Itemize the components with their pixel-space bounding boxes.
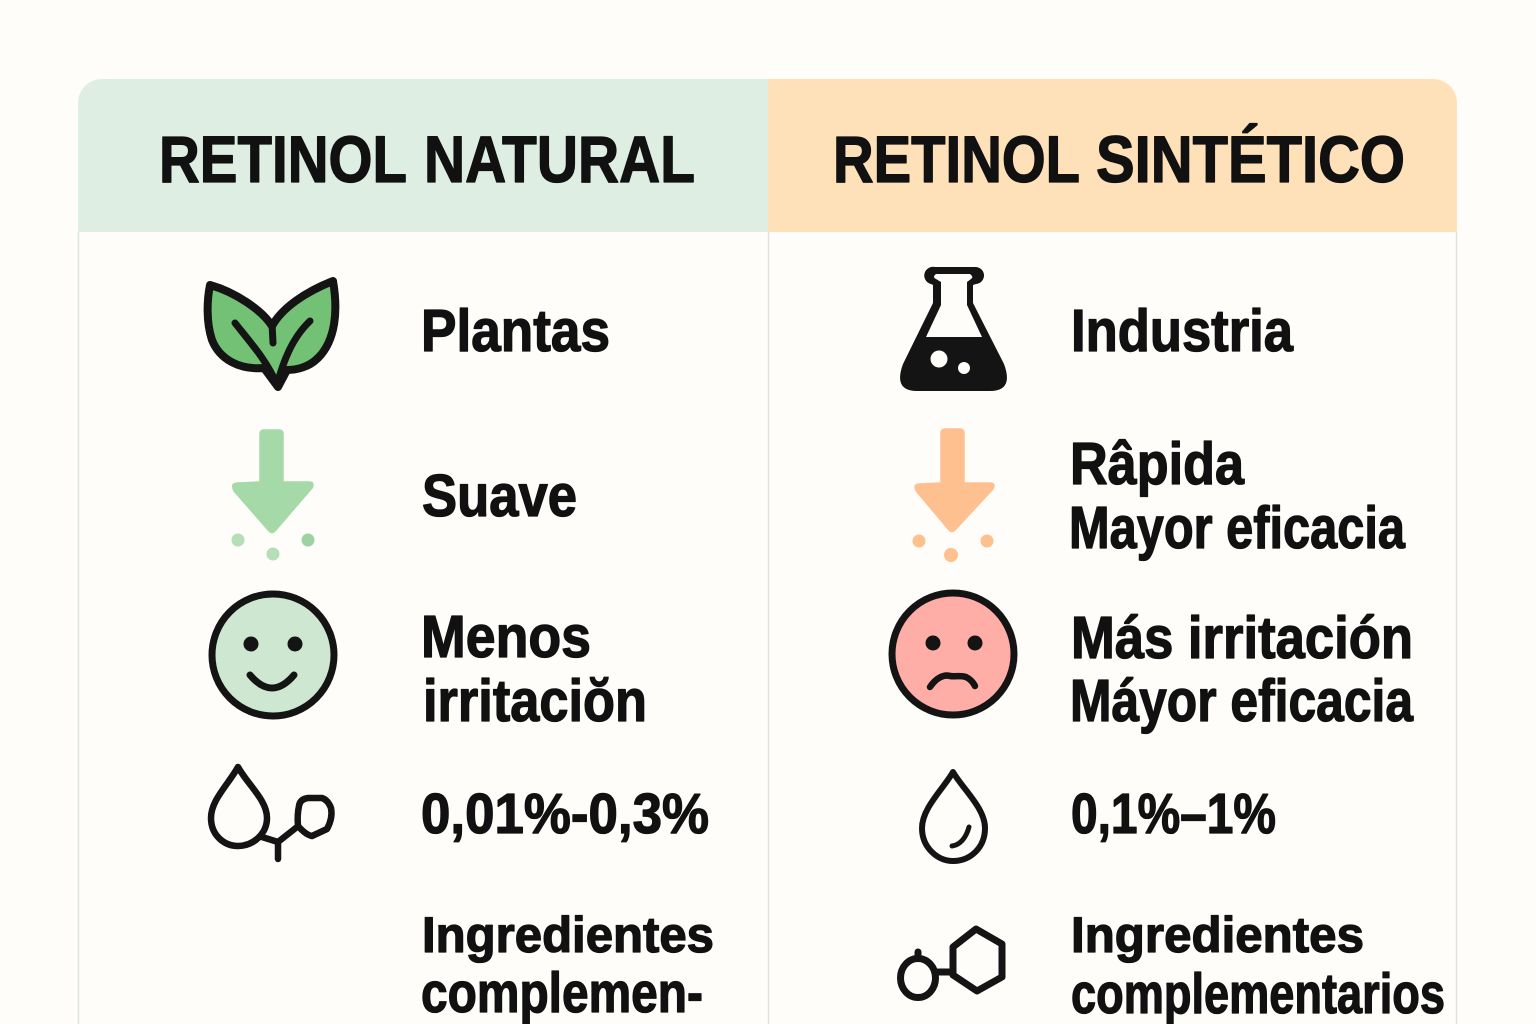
text: ingredientes complementarios natural [421,907,714,1024]
text: ingredientes complementarios natural: complemen- [421,961,703,1024]
text: concentration sintetico: 0,1%–1% [1071,782,1276,846]
text: menos irritacion [421,604,647,734]
text: plantas: Plantas [421,298,610,364]
text: mas irritacion mayor eficacia [1070,605,1414,734]
icon: drop with molecule [211,767,332,859]
icon: sad face [892,593,1014,715]
text: suave: Suave [422,463,577,529]
text: ingredientes complementarios natural: Ingredientes [422,907,714,963]
text: rapida mayor eficacia: Râpida [1070,431,1245,497]
heading: retinol natural: RETINOL [159,122,407,196]
panel: retinol sintetico [768,79,1457,1024]
panel body: natural [78,232,768,1024]
header band: natural [78,79,768,232]
text: menos irritacion: irritaciŏn [423,668,647,734]
text: mas irritacion mayor eficacia: Más irritación [1071,605,1413,671]
icon: molecule [900,929,1002,998]
text: concentration natural: 0,01%-0,3% [421,782,709,846]
icon: happy face [212,594,334,716]
icon: green down arrow [232,430,314,560]
text: ingredientes complementarios sintetico: Ingredientes [1071,907,1364,963]
text: rapida mayor eficacia: Mayor eficacia [1069,495,1406,561]
header band: sintetico [768,79,1457,232]
text: mas irritacion mayor eficacia: Máyor eficacia [1070,668,1414,734]
icon: leaves [208,281,335,387]
icon: drop [922,772,985,861]
text: ingredientes complementarios sintetico [1071,907,1445,1024]
panel edge: sintetico [1456,232,1458,1024]
text: menos irritacion: Menos [421,604,591,670]
heading: retinol natural: NATURAL [424,122,695,196]
heading: retinol sintetico: RETINOL [833,122,1080,196]
icon: flask [900,267,1007,391]
text: industria: Industria [1071,298,1294,364]
heading: retinol natural [159,122,695,196]
icon: orange down arrow [912,429,994,562]
heading: retinol sintetico: SINTÉTICO [1096,122,1405,196]
heading: retinol sintetico [833,122,1405,196]
text: rapida mayor eficacia [1069,431,1406,561]
panel: retinol natural [78,79,768,1024]
